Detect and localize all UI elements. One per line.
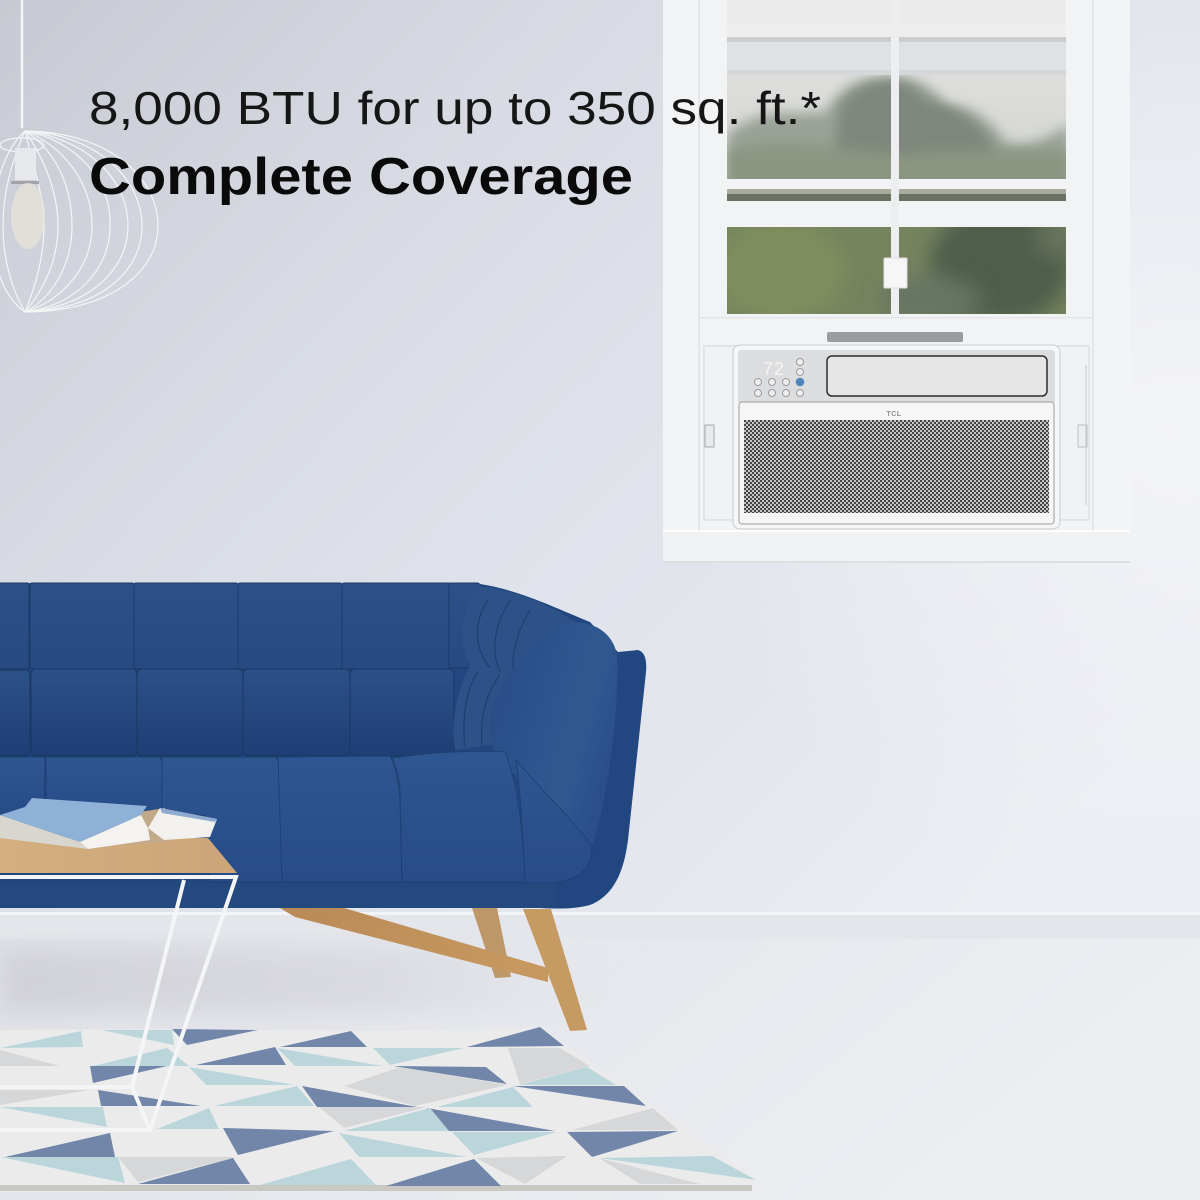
back cushions upper row bbox=[0, 583, 490, 669]
right side panel bbox=[1058, 346, 1089, 520]
headline text bbox=[89, 82, 821, 206]
window center mullion bbox=[891, 0, 899, 318]
window shade upper sash bbox=[727, 0, 1066, 76]
mesh grille bbox=[744, 420, 1049, 513]
window lower sash rail bbox=[700, 314, 1092, 346]
upper window view: trees bbox=[727, 75, 1070, 205]
temperature display: 72 bbox=[763, 359, 785, 379]
table frame bbox=[0, 877, 236, 1130]
rug bbox=[0, 1027, 761, 1192]
subheading: 8,000 BTU for up to 350 sq. ft.* bbox=[89, 82, 821, 134]
seat cushions bbox=[0, 751, 592, 883]
window frame bbox=[663, 0, 1130, 563]
pendant lamp bbox=[0, 0, 158, 312]
base rail bbox=[0, 882, 556, 908]
room background: wall bbox=[0, 0, 1200, 915]
rug dark triangles bbox=[5, 1027, 678, 1186]
rug light-blue triangles bbox=[0, 1030, 756, 1185]
sash handle bbox=[827, 332, 963, 342]
room background: floor bbox=[0, 912, 1200, 1200]
sash lock bbox=[884, 258, 907, 288]
lower window view: trees bbox=[727, 227, 1066, 314]
table top bbox=[0, 838, 237, 873]
coffee table bbox=[0, 838, 237, 1130]
rear leg bbox=[472, 908, 511, 978]
air outlet louver bbox=[827, 356, 1047, 396]
rug grey triangles bbox=[0, 1048, 700, 1184]
back cushions lower row bbox=[0, 669, 454, 756]
left side panel bbox=[704, 346, 736, 520]
arm cushion bbox=[490, 623, 617, 848]
control buttons bbox=[754, 358, 804, 396]
heading: Complete Coverage bbox=[89, 148, 633, 206]
tufted arm inner bbox=[453, 586, 585, 750]
front grille panel bbox=[739, 402, 1054, 524]
sofa bbox=[0, 583, 646, 909]
sofa base and back wing bbox=[0, 583, 646, 909]
air conditioner unit bbox=[733, 345, 1060, 529]
control panel bbox=[738, 350, 1055, 404]
diagonal brace bbox=[280, 908, 548, 982]
sofa legs bbox=[280, 908, 587, 1031]
open book bbox=[0, 798, 217, 849]
front leg bbox=[523, 909, 587, 1031]
brand logo: TCL bbox=[886, 411, 902, 418]
